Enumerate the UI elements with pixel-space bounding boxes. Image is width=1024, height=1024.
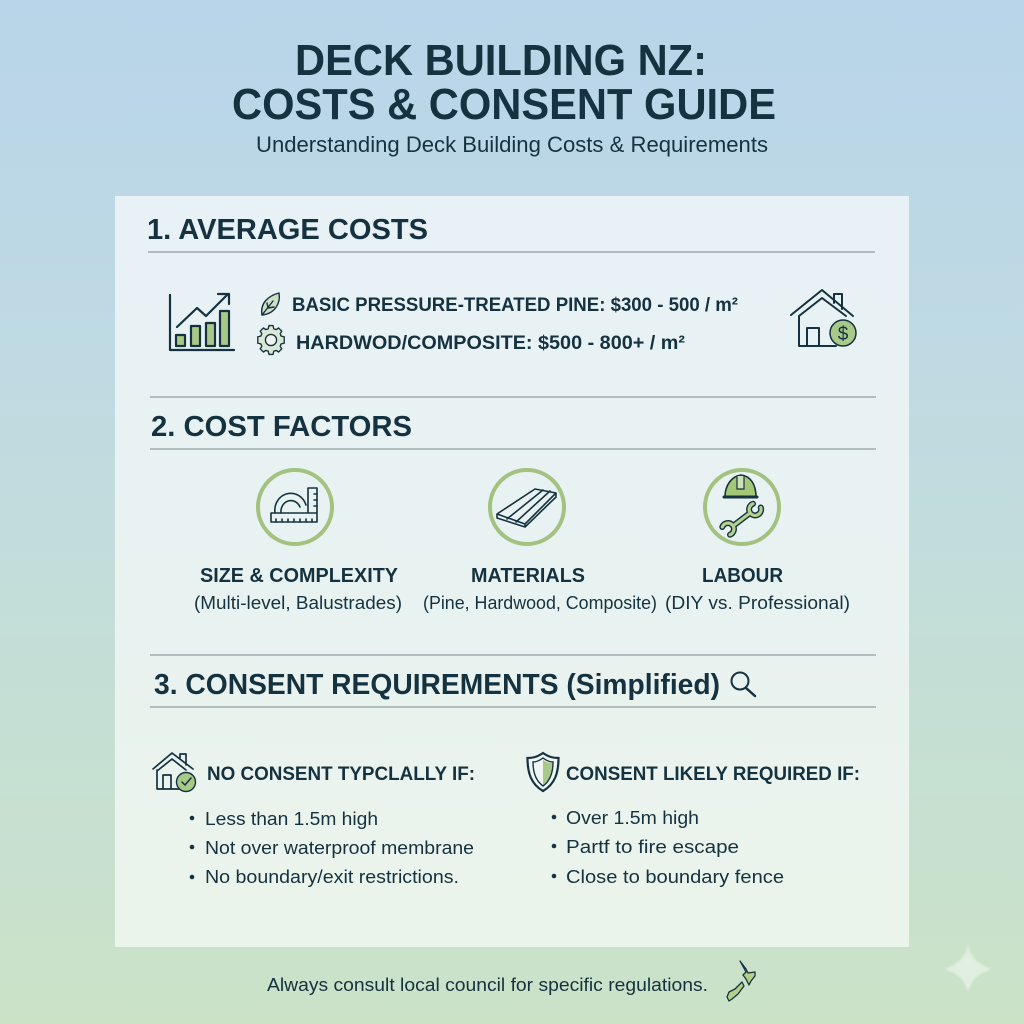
sublabel: (DIY vs. Professional) [665,592,850,613]
subtitle: Understanding Deck Building Costs & Requirements [256,132,768,157]
list [190,808,474,887]
text: pine cost: BASIC PRESSURE-TREATED PINE: $300 - 500 / m² [292,295,738,316]
list [552,807,784,887]
title [232,36,776,129]
label: LABOUR [702,565,784,587]
icon: hard hat and wrench [705,470,779,544]
heading: CONSENT LIKELY REQUIRED IF: [566,764,860,785]
panel: consent requirements [150,669,876,887]
icon: house with check [153,753,196,792]
list: Not over waterproof membrane [205,837,474,858]
icon: growth chart [170,294,234,350]
list: Close to boundary fence [566,866,784,887]
column: consent required [528,753,860,887]
label: SIZE & COMPLEXITY [200,565,399,587]
main panel [115,196,909,947]
panel: cost factors [150,411,876,613]
factor: materials [423,470,657,613]
text: hardwood cost: HARDWOD/COMPOSITE: $500 - 800+ / m² [296,333,685,354]
heading: average costs: 1. AVERAGE COSTS [147,214,428,246]
sublabel: (Pine, Hardwood, Composite) [423,592,657,613]
list: Less than 1.5m high [205,808,378,829]
column: no consent [153,753,475,887]
icon: new zealand map [727,961,755,1001]
heading: consent requirements: 3. CONSENT REQUIREMENTS (Simplified) [154,669,720,701]
heading: cost factors: 2. COST FACTORS [151,411,412,443]
heading: NO CONSENT TYPCLALLY IF: [207,764,475,785]
factor: labour [665,470,850,613]
list: No boundary/exit restrictions. [205,866,459,887]
panel: average costs [147,214,875,354]
icon: house with dollar [791,290,856,346]
sublabel: (Multi-level, Balustrades) [194,592,402,613]
decorative sparkle [944,945,992,992]
label: MATERIALS [471,565,585,587]
factor: size and complexity [194,470,402,613]
list: Over 1.5m high [566,807,699,828]
icon: ruler and protractor [258,470,332,544]
icon: leaf [262,293,279,315]
icon: gear [258,326,284,354]
list: Partf to fire escape [566,836,739,857]
footer note: Always consult local council for specific regulations. [267,974,708,995]
icon: shield [528,753,558,791]
title: COSTS & CONSENT GUIDE [232,80,776,129]
title: DECK BUILDING NZ: [295,36,707,85]
icon: magnifier [732,672,755,696]
icon: house with dollar: $ [838,324,849,345]
icon: timber planks [490,470,564,544]
